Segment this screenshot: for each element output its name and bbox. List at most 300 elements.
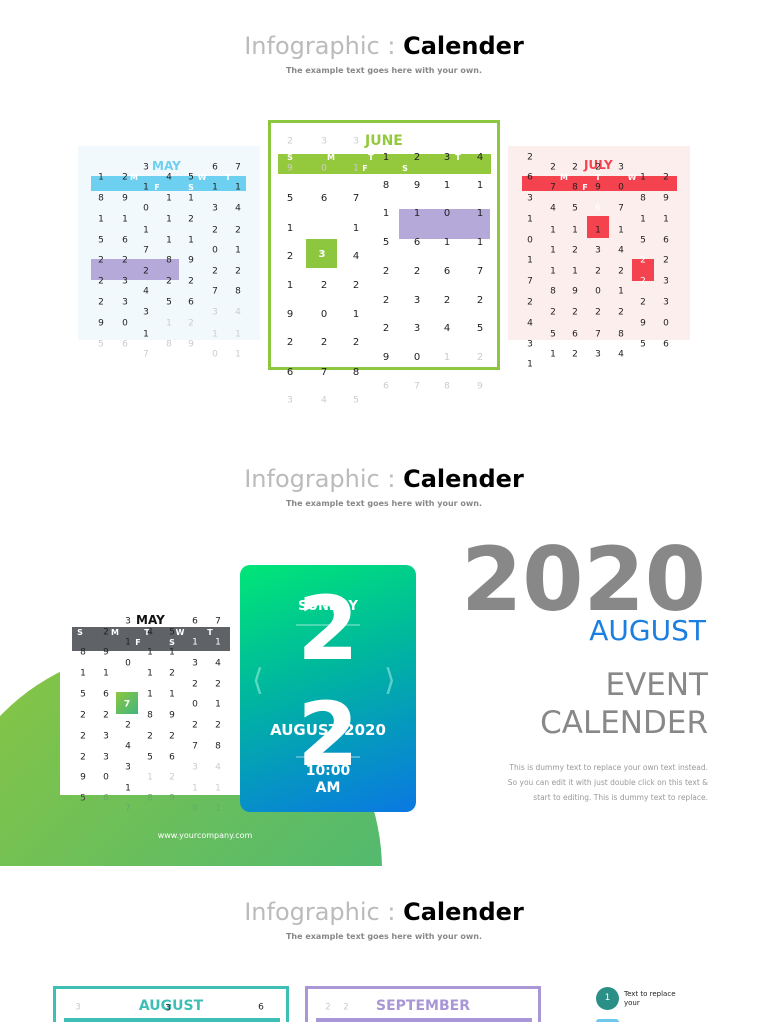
card: date display: SUNDAY — [298, 599, 358, 614]
text: 3 — [125, 616, 131, 626]
heading: EVENT CALENDER: EVENT — [605, 667, 708, 703]
panel: June calendar: 3 — [319, 249, 325, 260]
panel: July calendar: 8 — [572, 182, 578, 192]
panel: small May calendar: 1 — [169, 690, 175, 700]
panel: small May calendar: 1 — [147, 668, 153, 678]
panel: July calendar: 2 — [663, 256, 669, 266]
panel: July calendar: 1 — [527, 256, 533, 266]
panel: small May calendar: 8 — [80, 648, 86, 658]
panel: May calendar: 6 — [212, 162, 218, 172]
text: 0 — [192, 804, 198, 814]
panel: small May calendar: S — [169, 638, 175, 647]
panel: May calendar: 3 — [122, 298, 128, 308]
panel: small May calendar: 0 — [103, 772, 109, 782]
panel: July calendar: 1 — [550, 226, 556, 236]
panel: May calendar: 1 — [166, 214, 172, 224]
panel: July calendar: 0 — [527, 236, 533, 246]
text: 0 — [212, 350, 218, 360]
heading: 2020: 2020 — [461, 528, 706, 631]
panel: July calendar: 6 — [527, 172, 533, 182]
panel: May calendar: 2 — [188, 276, 194, 286]
panel: small May calendar: 2 — [192, 720, 198, 730]
panel: small May calendar: 5 — [80, 690, 86, 700]
text: 1 — [550, 350, 556, 360]
panel: June calendar: 2 — [321, 337, 327, 348]
panel: May calendar: 7 — [212, 286, 218, 296]
legend item 1: 1 — [605, 993, 610, 1003]
panel: September calendar — [305, 986, 541, 1022]
text: 1 — [527, 360, 533, 370]
panel: July calendar: 7 — [595, 330, 601, 340]
panel: May calendar: 2 — [212, 226, 218, 236]
panel: June calendar: F — [362, 164, 368, 173]
subtitle: section 1: The example text goes here with your own. — [286, 66, 482, 75]
panel: May calendar: 1 — [143, 182, 149, 192]
panel: May calendar: 9 — [98, 318, 104, 328]
panel: July calendar: 3 — [527, 194, 533, 204]
website: www.yourcompany.com — [158, 831, 252, 840]
panel: June calendar — [268, 120, 500, 370]
decorative green circle — [0, 672, 382, 866]
panel: small May calendar: 3 — [125, 762, 131, 772]
panel: June calendar: 5 — [383, 237, 389, 248]
panel: small May calendar: 2 — [125, 720, 131, 730]
text: 3 — [527, 340, 533, 350]
text: 6 — [122, 340, 128, 350]
panel: July calendar: 2 — [527, 298, 533, 308]
panel: June calendar: 2 — [287, 136, 293, 146]
panel: July calendar: 3 — [663, 298, 669, 308]
panel: May calendar: M — [130, 173, 138, 182]
panel: June calendar: 8 — [383, 180, 389, 191]
text: 6 — [192, 616, 198, 626]
panel: June calendar: 0 — [321, 164, 327, 174]
panel: small May calendar: 6 — [103, 690, 109, 700]
panel: May calendar: 1 — [166, 318, 172, 328]
panel: June calendar: 2 — [383, 323, 389, 334]
panel: July calendar: 1 — [550, 246, 556, 256]
panel: May calendar: 2 — [212, 266, 218, 276]
header bar — [522, 176, 677, 191]
text: 7 — [414, 382, 420, 392]
panel: August calendar: 3 — [165, 1004, 171, 1014]
text: 9 — [477, 382, 483, 392]
text: 2 — [572, 350, 578, 360]
panel: May calendar: 2 — [98, 276, 104, 286]
panel: June calendar: 1 — [444, 180, 450, 191]
panel: May calendar: 3 — [143, 308, 149, 318]
text: 5 — [98, 340, 104, 350]
panel: June calendar: 9 — [287, 164, 293, 174]
panel: June calendar: 1 — [287, 280, 293, 291]
panel: July calendar: 2 — [640, 276, 646, 286]
panel: May calendar: 7 — [143, 246, 149, 256]
panel: July calendar: 1 — [550, 266, 556, 276]
panel: May calendar: 8 — [98, 194, 104, 204]
panel: small May calendar: 2 — [169, 772, 175, 782]
panel: small May calendar: 2 — [80, 752, 86, 762]
panel: May calendar: 8 — [235, 286, 241, 296]
panel: July calendar: 2 — [663, 172, 669, 182]
panel: May calendar: 2 — [122, 172, 128, 182]
panel: May calendar: 2 — [122, 256, 128, 266]
panel: May calendar: 1 — [235, 182, 241, 192]
panel: July calendar: 2 — [550, 162, 556, 172]
card: date display: 10:00 — [306, 763, 350, 779]
panel: July calendar — [508, 146, 690, 340]
card: date display: 2 — [297, 577, 359, 680]
panel: July calendar: 7 — [527, 276, 533, 286]
panel: May calendar: 4 — [143, 286, 149, 296]
panel: June calendar: 2 — [477, 352, 483, 363]
panel: July calendar: 5 — [640, 236, 646, 246]
panel: July calendar: 2 — [595, 266, 601, 276]
panel: small May calendar: 5 — [169, 628, 175, 638]
panel: May calendar: 2 — [188, 214, 194, 224]
panel: May calendar: 2 — [98, 298, 104, 308]
panel: small May calendar: 2 — [103, 628, 109, 638]
panel: May calendar: 0 — [122, 318, 128, 328]
panel: June calendar: 3 — [414, 295, 420, 306]
panel: June calendar: S — [287, 153, 293, 162]
text: 8 — [444, 382, 450, 392]
panel: July calendar: M — [560, 173, 568, 182]
panel: July calendar: 2 — [640, 298, 646, 308]
text: 3 — [595, 350, 601, 360]
header bar — [278, 154, 491, 174]
panel: May calendar: 1 — [166, 236, 172, 246]
panel: May calendar — [78, 146, 260, 340]
panel: small May calendar: 2 — [215, 680, 221, 690]
text: 7 — [143, 350, 149, 360]
panel: July calendar: 9 — [640, 318, 646, 328]
panel: July calendar: 2 — [572, 162, 578, 172]
panel: June calendar: 5 — [287, 193, 293, 204]
panel: May calendar: 1 — [235, 330, 241, 340]
text: 8 — [353, 367, 359, 378]
panel: small May calendar: 6 — [169, 752, 175, 762]
panel: May calendar: 2 — [188, 318, 194, 328]
panel: small May calendar: 7 — [124, 700, 130, 710]
panel: small May calendar: 2 — [215, 720, 221, 730]
panel: small May calendar: 3 — [103, 752, 109, 762]
panel: July calendar: 5 — [550, 330, 556, 340]
panel: May calendar: 7 — [235, 162, 241, 172]
legend item 1: your — [624, 999, 640, 1007]
panel: May calendar: 1 — [188, 236, 194, 246]
panel: July calendar: T — [595, 173, 601, 182]
text: 6 — [383, 382, 389, 392]
panel: small May calendar: 9 — [169, 710, 175, 720]
panel: June calendar: 1 — [477, 208, 483, 219]
panel: June calendar: 2 — [383, 266, 389, 277]
panel: May calendar: 5 — [166, 298, 172, 308]
panel: May calendar: 3 — [212, 204, 218, 214]
panel: July calendar: 7 — [550, 182, 556, 192]
panel: June calendar: 9 — [383, 352, 389, 363]
panel: June calendar: 4 — [353, 251, 359, 262]
panel: small May calendar: W — [176, 628, 184, 637]
card: date display — [240, 565, 416, 812]
subtitle: section 3: The example text goes here with your own. — [286, 932, 482, 941]
subtitle: section 2: The example text goes here with your own. — [286, 499, 482, 508]
panel: May calendar: 1 — [122, 214, 128, 224]
panel: small May calendar: 1 — [125, 638, 131, 648]
panel: July calendar: 3 — [618, 162, 624, 172]
panel: June calendar: 1 — [444, 352, 450, 363]
panel: small May calendar: 9 — [103, 648, 109, 658]
panel: June calendar: 2 — [414, 152, 420, 163]
panel: July calendar: 1 — [618, 286, 624, 296]
panel: June calendar: 1 — [383, 208, 389, 219]
month label: JULY — [584, 158, 613, 172]
panel: small May calendar: 2 — [80, 732, 86, 742]
legend item 1: Text to replace — [624, 990, 676, 998]
text: 1 — [235, 350, 241, 360]
panel: July calendar: 2 — [527, 152, 533, 162]
panel: small May calendar: 7 — [192, 742, 198, 752]
panel: May calendar: 1 — [212, 182, 218, 192]
panel: July calendar: 5 — [572, 204, 578, 214]
panel: June calendar: 6 — [444, 266, 450, 277]
chevrons: ⟨ — [252, 663, 264, 698]
panel: small May calendar: 4 — [215, 658, 221, 668]
panel: June calendar: 6 — [414, 237, 420, 248]
panel: small May calendar: 4 — [215, 762, 221, 772]
panel: small May calendar: 2 — [80, 710, 86, 720]
panel: July calendar: 2 — [618, 308, 624, 318]
panel: small May calendar: 8 — [147, 710, 153, 720]
panel: May calendar: 3 — [212, 308, 218, 318]
panel: July calendar: 0 — [595, 286, 601, 296]
panel: small May calendar: 1 — [80, 668, 86, 678]
panel: July calendar: 1 — [640, 172, 646, 182]
panel: June calendar: 2 — [383, 295, 389, 306]
panel: July calendar: 0 — [618, 182, 624, 192]
panel: small May calendar: 1 — [192, 784, 198, 794]
panel: May calendar: 4 — [235, 204, 241, 214]
panel: May calendar: W — [198, 173, 206, 182]
text block: start to editing. This is dummy text to replace. — [533, 793, 708, 802]
panel: small May calendar: 1 — [192, 638, 198, 648]
panel: May calendar: 1 — [212, 330, 218, 340]
panel: June calendar: S — [402, 164, 408, 173]
panel: small May calendar: 0 — [125, 658, 131, 668]
panel: small May calendar: 1 — [169, 648, 175, 658]
panel: July calendar: 1 — [640, 214, 646, 224]
panel: June calendar: 0 — [444, 208, 450, 219]
panel: July calendar: 1 — [572, 226, 578, 236]
panel: June calendar: 1 — [383, 152, 389, 163]
panel: June calendar: 2 — [287, 337, 293, 348]
text: 7 — [321, 367, 327, 378]
panel: small May calendar: 1 — [215, 784, 221, 794]
text: 6 — [663, 340, 669, 350]
panel: May calendar: F — [154, 183, 160, 192]
card: date display: 2 — [297, 683, 359, 786]
panel: small May calendar: S — [77, 628, 83, 637]
panel: May calendar: 1 — [143, 226, 149, 236]
panel: July calendar: 4 — [618, 246, 624, 256]
panel: July calendar: 8 — [640, 194, 646, 204]
header bar — [91, 176, 246, 191]
panel: May calendar: 1 — [166, 194, 172, 204]
panel: September calendar: 2 — [325, 1002, 331, 1012]
text: 7 — [215, 616, 221, 626]
panel: July calendar: 9 — [595, 182, 601, 192]
panel: May calendar: 8 — [166, 256, 172, 266]
panel: May calendar: 1 — [188, 194, 194, 204]
panel: June calendar: 1 — [414, 208, 420, 219]
panel: small May calendar: 1 — [215, 700, 221, 710]
panel: July calendar: 2 — [550, 308, 556, 318]
panel: May calendar: 4 — [166, 172, 172, 182]
panel: June calendar: 3 — [321, 136, 327, 146]
header bar — [72, 627, 230, 651]
panel: July calendar: 6 — [572, 330, 578, 340]
panel: small May calendar: 2 — [169, 668, 175, 678]
panel: small May calendar: F — [135, 638, 141, 647]
panel: July calendar: 9 — [572, 286, 578, 296]
title: section 1: Infographic : Calender — [244, 32, 524, 60]
text: 3 — [287, 396, 293, 406]
panel: June calendar: 0 — [414, 352, 420, 363]
panel: June calendar: 3 — [353, 136, 359, 146]
panel: small May calendar: 3 — [192, 658, 198, 668]
panel: small May calendar: 2 — [103, 710, 109, 720]
panel: July calendar: 9 — [663, 194, 669, 204]
panel: small May calendar: 1 — [147, 772, 153, 782]
title: section 2: Infographic : Calender — [244, 465, 524, 493]
panel: June calendar: 2 — [353, 280, 359, 291]
panel: August calendar — [53, 986, 289, 1022]
panel: June calendar: 0 — [321, 309, 327, 320]
panel: May calendar: 2 — [143, 266, 149, 276]
panel: June calendar: 2 — [414, 266, 420, 277]
heading: EVENT CALENDER — [540, 667, 708, 741]
panel: July calendar: 2 — [618, 266, 624, 276]
text: 4 — [618, 350, 624, 360]
panel: July calendar: 1 — [595, 226, 601, 236]
panel: May calendar: 2 — [166, 276, 172, 286]
panel: May calendar: 6 — [188, 298, 194, 308]
panel: September calendar: SEPTEMBER — [376, 998, 470, 1014]
panel: July calendar: 3 — [595, 246, 601, 256]
panel: May calendar: 0 — [143, 204, 149, 214]
panel: July calendar: 6 — [663, 236, 669, 246]
text: 6 — [103, 794, 109, 804]
panel: June calendar: M — [327, 153, 335, 162]
month label: MAY — [136, 613, 165, 627]
panel: small May calendar: 4 — [147, 628, 153, 638]
panel: July calendar: 2 — [595, 308, 601, 318]
panel: August calendar: 3 — [75, 1002, 81, 1012]
month label: MAY — [152, 159, 181, 173]
panel: July calendar: 2 — [572, 246, 578, 256]
panel: May calendar: S — [188, 183, 194, 192]
panel: small May calendar: 0 — [192, 700, 198, 710]
text: 9 — [169, 794, 175, 804]
panel: small May calendar: 9 — [80, 772, 86, 782]
panel: July calendar: 2 — [640, 256, 646, 266]
text: 9 — [188, 340, 194, 350]
panel: June calendar: 4 — [477, 152, 483, 163]
text: 5 — [353, 396, 359, 406]
panel: small May calendar: 2 — [147, 732, 153, 742]
panel: May calendar: 1 — [143, 330, 149, 340]
panel: June calendar: 1 — [477, 180, 483, 191]
card: date display: AM — [316, 780, 340, 796]
panel: July calendar: W — [628, 173, 636, 182]
panel: May calendar: 4 — [235, 308, 241, 318]
panel: June calendar: 4 — [444, 323, 450, 334]
panel: May calendar: 0 — [212, 246, 218, 256]
text block: So you can edit it with just double click on this text & — [508, 778, 708, 787]
panel: small May calendar: T — [207, 628, 213, 637]
panel: July calendar: 2 — [572, 308, 578, 318]
panel: July calendar: 3 — [663, 276, 669, 286]
panel: June calendar: 2 — [477, 295, 483, 306]
panel: May calendar: T — [225, 173, 231, 182]
panel: May calendar: 9 — [122, 194, 128, 204]
panel: May calendar: 1 — [98, 172, 104, 182]
panel: May calendar: 2 — [235, 266, 241, 276]
panel: small May calendar: M — [111, 628, 119, 637]
panel: July calendar: 1 — [572, 266, 578, 276]
panel: June calendar: 2 — [287, 251, 293, 262]
panel: July calendar: 8 — [550, 286, 556, 296]
panel: May calendar: 5 — [188, 172, 194, 182]
panel: May calendar: 3 — [122, 276, 128, 286]
panel: June calendar: 3 — [414, 323, 420, 334]
panel: June calendar: 1 — [353, 309, 359, 320]
panel: small May calendar: 1 — [215, 638, 221, 648]
panel: small May calendar: 5 — [147, 752, 153, 762]
panel: small May calendar: 8 — [215, 742, 221, 752]
panel: small May calendar: 3 — [103, 732, 109, 742]
card: date display: AUGUST 2020 — [270, 721, 386, 739]
text: 6 — [287, 367, 293, 378]
panel: June calendar: 3 — [444, 152, 450, 163]
panel: June calendar: 5 — [477, 323, 483, 334]
panel: small May calendar: 1 — [147, 690, 153, 700]
text: 5 — [80, 794, 86, 804]
panel: June calendar: 2 — [444, 295, 450, 306]
panel: June calendar: 6 — [321, 193, 327, 204]
panel: June calendar: 1 — [353, 164, 359, 174]
panel: July calendar: 1 — [663, 214, 669, 224]
panel: May calendar: 6 — [122, 236, 128, 246]
panel: July calendar: 1 — [527, 214, 533, 224]
panel: June calendar: 1 — [444, 237, 450, 248]
text: 8 — [166, 340, 172, 350]
panel: June calendar: T — [368, 153, 374, 162]
text block — [508, 763, 708, 802]
month label: JUNE — [365, 133, 403, 149]
title: section 3: Infographic : Calender — [244, 898, 524, 926]
panel: July calendar: 6 — [595, 204, 601, 214]
panel: August calendar: AUGUST — [139, 998, 203, 1014]
panel: June calendar: T — [455, 153, 461, 162]
panel: small May calendar: 2 — [192, 680, 198, 690]
panel: August calendar: 6 — [258, 1002, 264, 1012]
panel: May calendar: 1 — [98, 214, 104, 224]
panel: May calendar: 2 — [98, 256, 104, 266]
panel: small May calendar: 1 — [147, 648, 153, 658]
panel: small May calendar: 4 — [125, 742, 131, 752]
panel: May calendar: 9 — [188, 256, 194, 266]
panel: July calendar: 4 — [527, 318, 533, 328]
